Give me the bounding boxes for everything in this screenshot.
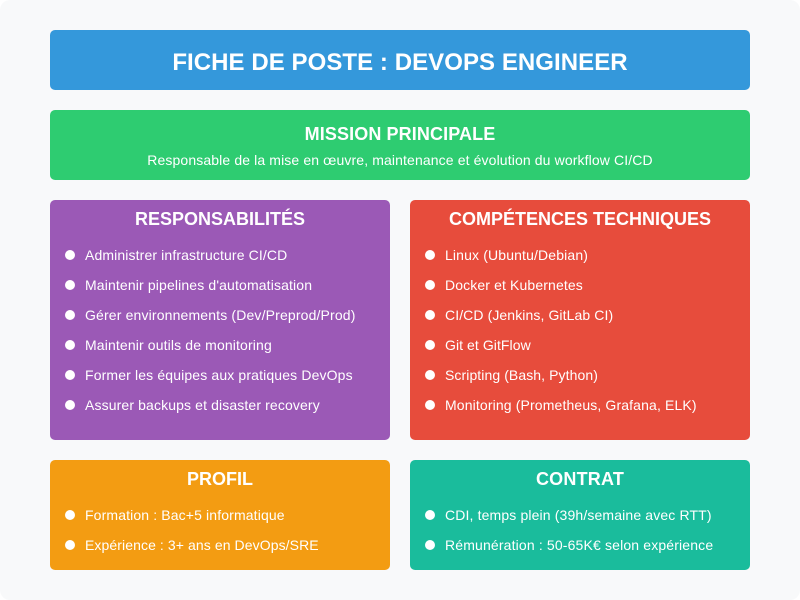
panel: mission principale: MISSION PRINCIPALE — [305, 124, 495, 144]
panel: contrat: CDI, temps plein (39h/semaine avec RTT) — [445, 507, 712, 523]
panel: compétences techniques: Docker et Kubernetes — [445, 277, 583, 293]
panel: compétences techniques: COMPÉTENCES TECHNIQUES — [449, 208, 711, 229]
panel: responsabilités: Maintenir pipelines d'automatisation — [85, 277, 312, 293]
panel: contrat: Rémunération : 50-65K€ selon expérience — [445, 537, 713, 553]
panel: responsabilités: RESPONSABILITÉS — [135, 208, 305, 229]
panel: compétences techniques: Scripting (Bash, Python) — [445, 367, 598, 383]
panel: contrat — [410, 460, 750, 570]
panel: compétences techniques — [410, 200, 750, 440]
panel: responsabilités: Gérer environnements (Dev/Preprod/Prod) — [85, 307, 356, 323]
panel: responsabilités: Administrer infrastructure CI/CD — [85, 247, 287, 263]
panel: compétences techniques: Monitoring (Prometheus, Grafana, ELK) — [445, 397, 697, 413]
panel: profil — [50, 460, 390, 570]
panel: profil: Expérience : 3+ ans en DevOps/SRE — [85, 537, 319, 553]
panel: compétences techniques: Linux (Ubuntu/Debian) — [445, 247, 588, 263]
panel: mission principale: Responsable de la mise en œuvre, maintenance et évolution du workflow CI/CD — [147, 152, 653, 168]
panel: responsabilités — [50, 200, 390, 440]
panel: responsabilités: Assurer backups et disaster recovery — [85, 397, 320, 413]
panel: compétences techniques: CI/CD (Jenkins, GitLab CI) — [445, 307, 613, 323]
panel: profil: Formation : Bac+5 informatique — [85, 507, 285, 523]
panel: compétences techniques: Git et GitFlow — [445, 337, 532, 353]
title banner — [50, 30, 750, 90]
panel: contrat: CONTRAT — [536, 469, 624, 489]
title banner: FICHE DE POSTE : DEVOPS ENGINEER — [172, 49, 628, 76]
panel: profil: PROFIL — [187, 469, 253, 489]
panel: responsabilités: Former les équipes aux pratiques DevOps — [85, 367, 353, 383]
panel: mission principale — [50, 110, 750, 180]
panel: responsabilités: Maintenir outils de monitoring — [85, 337, 272, 353]
